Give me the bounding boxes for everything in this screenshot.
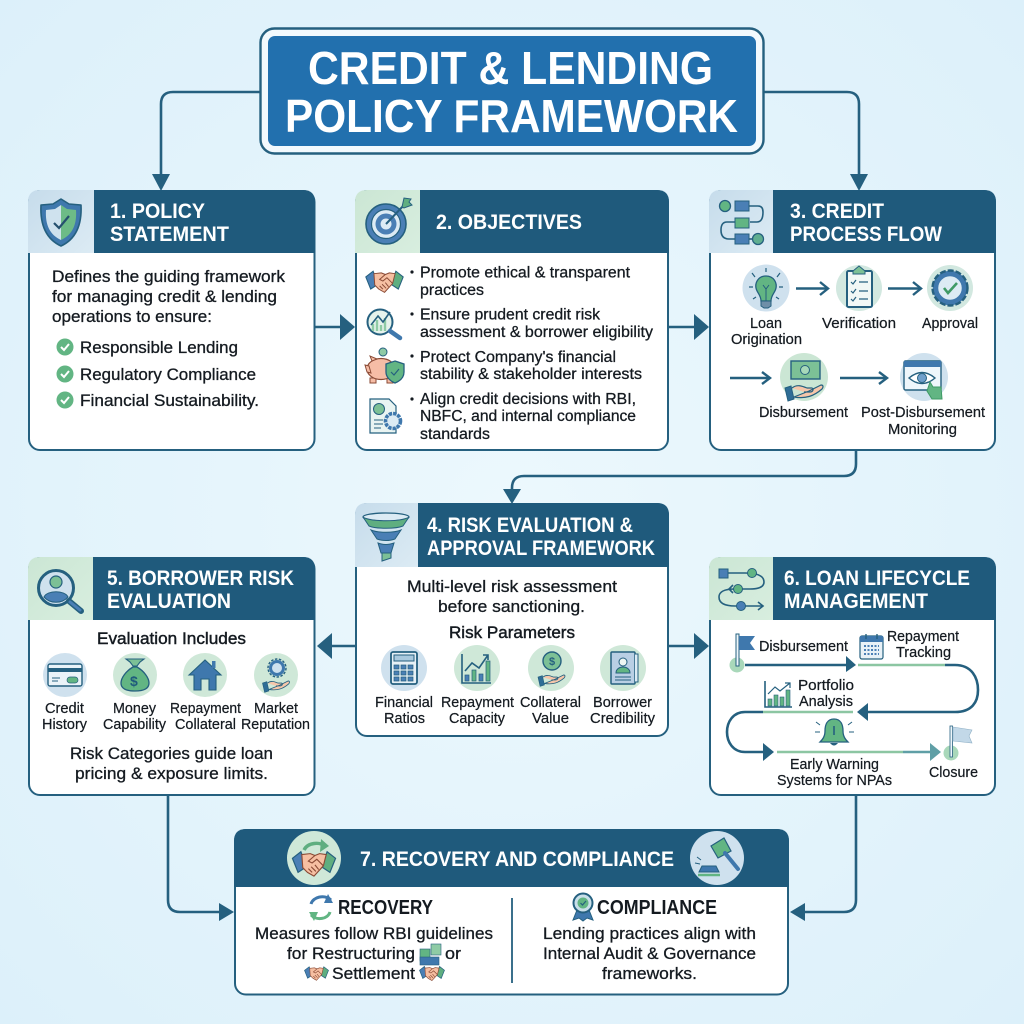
icon: shield — [41, 199, 81, 246]
subpanel: compliance: Lending practices align with — [543, 925, 756, 943]
process labels: Monitoring — [888, 422, 957, 438]
icon: house — [183, 653, 227, 697]
heading: 3. CREDIT — [790, 199, 884, 223]
evaluation labels: Reputation — [241, 717, 310, 733]
icon: money bag — [113, 653, 157, 697]
title banner: POLICY FRAMEWORK — [285, 90, 738, 142]
icon: money bag: $ — [130, 673, 138, 689]
icon: lightbulb — [742, 264, 790, 312]
icon: clipboard — [836, 265, 882, 311]
text: objectives list: stability & stakeholder interests — [420, 366, 642, 383]
subpanel: compliance: Internal Audit & Governance — [543, 945, 756, 963]
arrow — [796, 282, 828, 295]
subpanel: recovery — [255, 894, 493, 983]
label: portfolio analysis: Portfolio — [798, 678, 854, 694]
arrow — [730, 372, 770, 384]
process labels: Disbursement — [759, 405, 848, 421]
text: objectives list: assessment & borrower eligibility — [420, 324, 653, 341]
label: disbursement: Disbursement — [759, 639, 848, 655]
subpanel: recovery: RECOVERY — [338, 897, 434, 919]
process labels: Loan — [750, 316, 782, 332]
icon: award ribbon — [573, 894, 593, 921]
icon: lifecycle path — [719, 568, 764, 610]
icon: reputation gear in hand — [254, 653, 298, 697]
heading: EVALUATION — [107, 589, 231, 613]
heading: 6. LOAN LIFECYCLE — [784, 566, 970, 590]
text: objectives list: NBFC, and internal compliance — [420, 408, 636, 425]
icon: restructuring blocks — [420, 944, 441, 965]
parameter labels: Capacity — [449, 711, 506, 727]
label: closure: Closure — [929, 765, 978, 781]
icon: growth chart — [454, 645, 500, 691]
parameter labels — [375, 695, 656, 727]
evaluation labels: Money — [113, 701, 157, 717]
icon: handshake — [366, 271, 403, 292]
subpanel: recovery: Measures follow RBI guidelines — [255, 925, 493, 943]
icon: cash in hand — [780, 353, 828, 401]
text: risk categories — [70, 745, 273, 783]
text: objectives list: standards — [420, 426, 490, 443]
heading — [427, 513, 655, 560]
icon: piggy bank — [365, 348, 404, 383]
label: early warning: Early Warning — [790, 757, 879, 773]
icon: approval seal — [927, 265, 973, 311]
text: description: before sanctioning. — [438, 598, 585, 616]
divider — [511, 898, 513, 983]
label: portfolio analysis — [798, 678, 854, 710]
icon: start flag — [730, 634, 755, 672]
connector arrows — [152, 92, 868, 921]
panel: 1 policy statement — [28, 190, 315, 450]
heading: 4. RISK EVALUATION & — [427, 513, 633, 537]
process labels: Approval — [922, 316, 978, 332]
heading: MANAGEMENT — [784, 589, 928, 613]
text: description: Multi-level risk assessment — [407, 578, 617, 596]
subpanel: compliance — [543, 894, 756, 983]
icon: portfolio chart — [765, 681, 792, 707]
heading — [107, 566, 294, 613]
parameter labels: Collateral — [520, 695, 581, 711]
text: objectives list: Align credit decisions with RBI, — [420, 391, 636, 408]
evaluation labels: Credit — [45, 701, 84, 717]
checklist: Financial Sustainability. — [80, 392, 259, 410]
subpanel: recovery: for Restructuring — [287, 945, 415, 963]
parameter labels: Repayment — [441, 695, 514, 711]
subheading: Evaluation Includes — [97, 629, 246, 648]
icon: collateral coin in hand — [528, 645, 574, 691]
text: objectives list: Protect Company's financial — [420, 349, 616, 366]
text: intro: operations to ensure: — [52, 308, 212, 326]
evaluation labels: History — [42, 717, 88, 733]
heading — [110, 199, 229, 246]
process labels: Verification — [822, 316, 896, 332]
panel: 4 risk evaluation and approval — [355, 503, 669, 736]
title banner — [260, 28, 764, 154]
panel: 6 loan lifecycle management — [709, 557, 996, 795]
icon: chart magnifier — [368, 310, 400, 338]
icon: handshake — [305, 967, 328, 980]
heading: 2. OBJECTIVES — [436, 210, 582, 234]
icon: gavel — [690, 831, 744, 885]
parameter labels: Ratios — [384, 711, 425, 727]
subpanel: recovery: Settlement — [332, 965, 415, 983]
label: early warning: Systems for NPAs — [777, 773, 892, 789]
text: intro: for managing credit & lending — [52, 288, 277, 306]
icon: funnel — [363, 513, 409, 561]
checklist — [56, 338, 259, 410]
label: repayment tracking: Repayment — [887, 629, 959, 645]
heading — [784, 566, 970, 613]
icon: calculator — [381, 645, 427, 691]
text: objectives list: Ensure prudent credit risk — [420, 306, 600, 324]
icon: recovery handshake — [287, 831, 341, 885]
subpanel: compliance: COMPLIANCE — [597, 897, 717, 919]
heading: 1. POLICY — [110, 199, 205, 223]
subheading: Risk Parameters — [449, 623, 575, 642]
panel: 7 recovery and compliance — [234, 829, 789, 994]
checklist: Responsible Lending — [80, 339, 238, 357]
subpanel: recovery: or — [445, 945, 462, 963]
icon: flowchart — [720, 200, 764, 244]
parameter labels: Value — [532, 711, 569, 727]
text: objectives list: practices — [420, 282, 484, 299]
parameter labels: Credibility — [590, 711, 656, 727]
icon: closure flag — [944, 726, 972, 760]
heading — [790, 199, 943, 246]
heading: PROCESS FLOW — [790, 222, 943, 246]
text: description — [407, 578, 617, 616]
icon: credibility badge — [600, 645, 646, 691]
icon: magnifier person — [38, 570, 81, 611]
checklist: Regulatory Compliance — [80, 366, 256, 384]
panel: 2 objectives — [355, 190, 669, 450]
lifecycle timeline — [727, 656, 978, 761]
icon: warning bell — [815, 719, 854, 746]
text: intro: Defines the guiding framework — [52, 268, 286, 286]
panel: 3 credit process flow — [709, 190, 996, 450]
title banner: CREDIT & LENDING — [308, 42, 713, 94]
text: risk categories: pricing & exposure limits. — [75, 765, 268, 783]
text: risk categories: Risk Categories guide loan — [70, 745, 273, 763]
heading: 7. RECOVERY AND COMPLIANCE — [360, 847, 674, 871]
icon: recycle arrows — [309, 894, 333, 921]
icon: calendar — [860, 634, 883, 659]
process labels: Post-Disbursement — [861, 405, 985, 421]
evaluation labels: Capability — [103, 717, 167, 733]
icon: handshake — [420, 966, 444, 981]
parameter labels: Financial — [375, 695, 433, 711]
label: portfolio analysis: Analysis — [799, 694, 853, 710]
evaluation labels: Repayment — [170, 701, 241, 717]
label: repayment tracking — [887, 629, 959, 661]
heading: 5. BORROWER RISK — [107, 566, 294, 590]
text: objectives list: Promote ethical & transparent — [420, 264, 631, 282]
icon: target — [366, 198, 412, 244]
process labels: Origination — [731, 332, 802, 348]
arrow — [840, 372, 887, 384]
process labels — [731, 316, 985, 438]
parameter labels: Borrower — [593, 695, 652, 711]
label: early warning — [777, 757, 892, 789]
icon: collateral coin in hand: $ — [549, 656, 555, 668]
arrow — [888, 282, 921, 295]
icon: credit card — [43, 653, 87, 697]
evaluation labels — [42, 701, 310, 733]
subpanel: compliance: frameworks. — [602, 965, 697, 983]
heading: STATEMENT — [110, 222, 229, 246]
text: objectives list — [410, 264, 653, 443]
icon: monitoring eye — [900, 353, 948, 401]
evaluation labels: Collateral — [175, 717, 236, 733]
label: repayment tracking: Tracking — [896, 645, 951, 661]
evaluation labels: Market — [254, 701, 298, 717]
text: intro — [52, 268, 286, 326]
icon: document gear — [370, 399, 400, 433]
panel: 5 borrower risk evaluation — [28, 557, 315, 795]
heading: APPROVAL FRAMEWORK — [427, 536, 655, 560]
